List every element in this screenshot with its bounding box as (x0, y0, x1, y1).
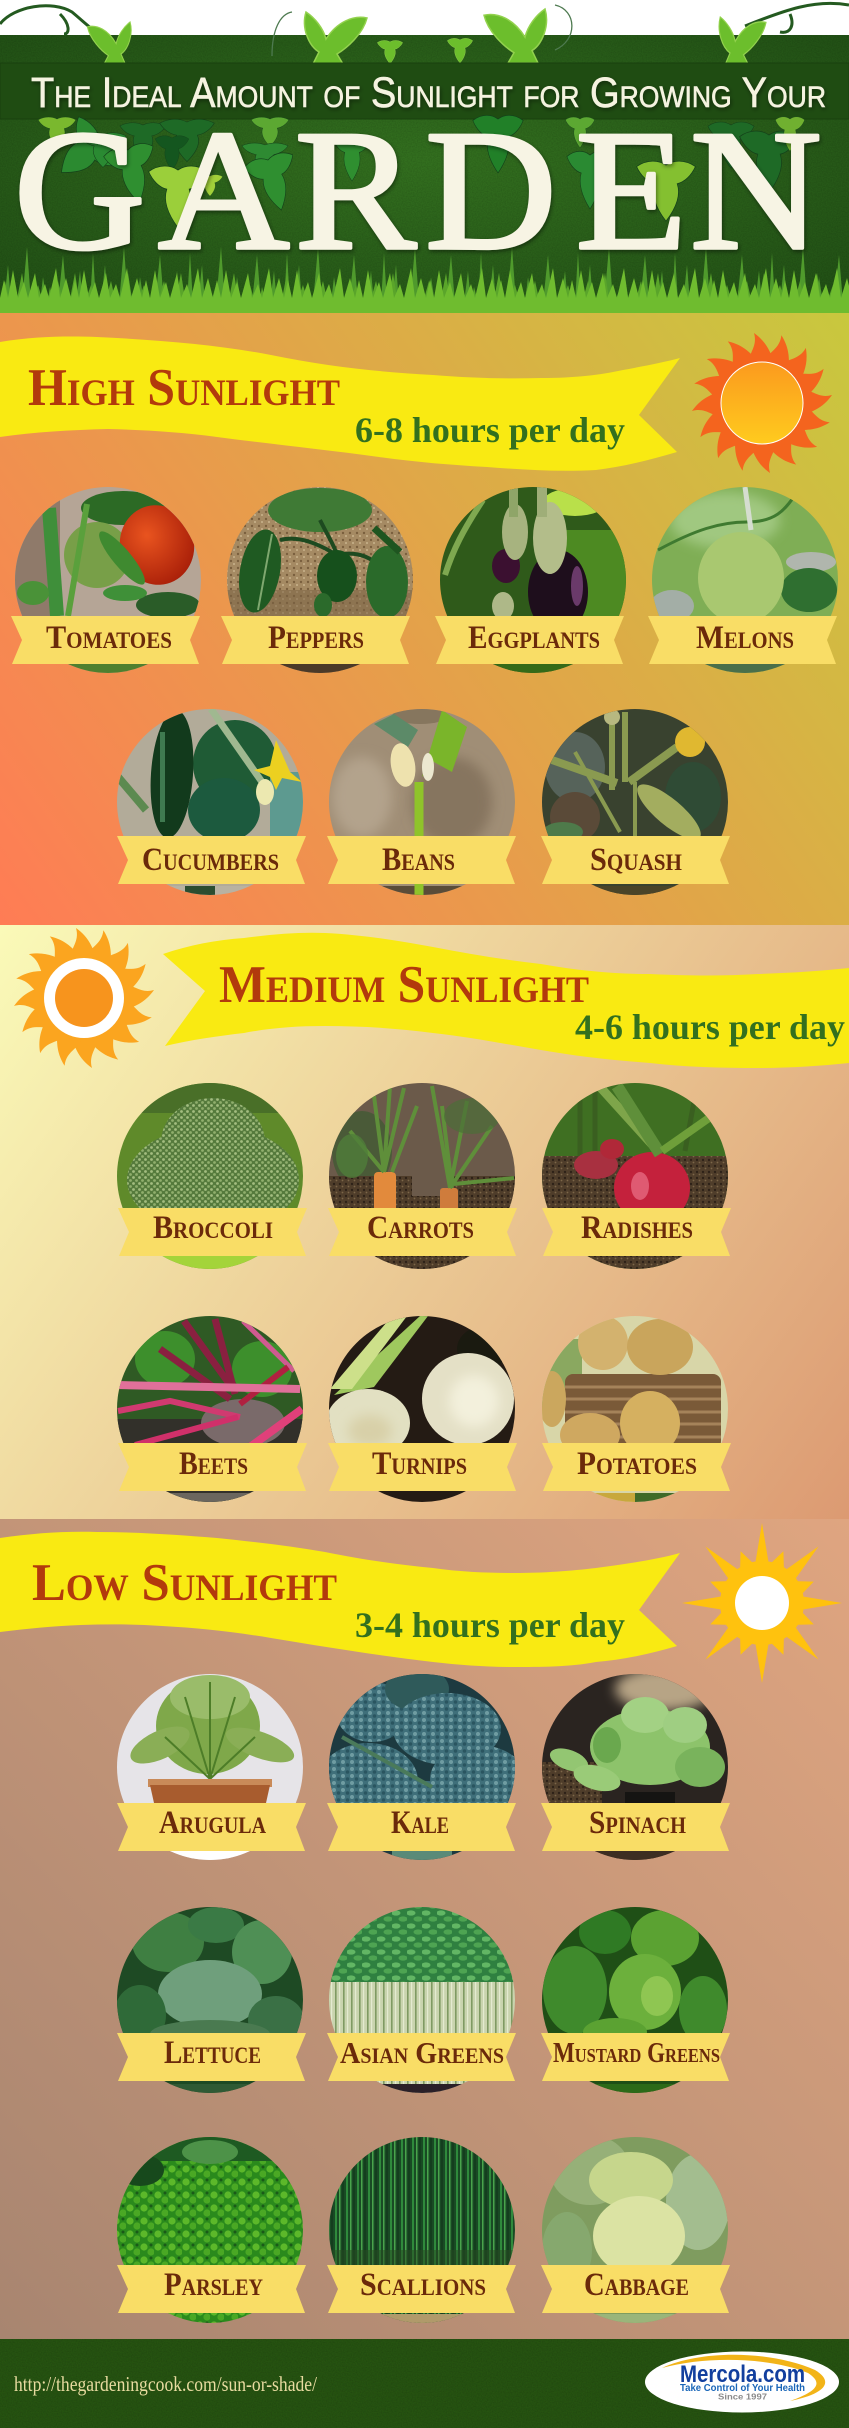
label: Mustard Greens (553, 2038, 720, 2069)
ribbon (118, 1443, 307, 1491)
ribbon (327, 2033, 516, 2081)
ribbon (11, 616, 200, 664)
label: Radishes (581, 1210, 693, 1246)
card: beets (117, 1316, 307, 1502)
card: peppers (221, 487, 413, 673)
label: Spinach (589, 1805, 686, 1841)
logo: mercola: Mercola.com (680, 2361, 805, 2388)
card: lettuce (114, 1907, 306, 2093)
card: broccoli (117, 1083, 307, 1269)
ribbon (117, 836, 306, 884)
label: Arugula (159, 1805, 266, 1841)
photo: turnips (326, 1316, 515, 1502)
footer (0, 2339, 849, 2428)
tendrils (272, 5, 572, 56)
label: Potatoes (577, 1446, 697, 1482)
ribbon (221, 616, 410, 664)
photo: arugula (117, 1674, 303, 1860)
ribbon (327, 836, 516, 884)
label: Carrots (367, 1210, 474, 1246)
ribbon (435, 616, 624, 664)
icon: low sun (682, 1523, 842, 1683)
heading: high sunlight: High Sunlight (28, 359, 340, 417)
ribbon (542, 1208, 731, 1256)
photo: peppers (227, 487, 413, 673)
label: Turnips (372, 1446, 467, 1482)
photo: asian greens (329, 1907, 515, 2093)
card: radishes (542, 1083, 731, 1269)
card: scallions (327, 2137, 516, 2323)
heading: medium sunlight: Medium Sunlight (219, 956, 589, 1014)
card: spinach (541, 1667, 730, 1860)
photo: broccoli (117, 1083, 303, 1269)
logo: mercola: Take Control of Your Health (680, 2382, 805, 2394)
card: turnips (326, 1316, 517, 1502)
card: arugula (117, 1674, 306, 1860)
photo: cabbage (542, 2135, 730, 2323)
photo: lettuce (114, 1907, 304, 2093)
card: squash (541, 709, 730, 895)
icon: medium sun (14, 928, 154, 1068)
ribbon (541, 1803, 730, 1851)
photo: spinach (542, 1667, 728, 1860)
panel: medium sunlight (0, 925, 849, 1519)
vine: top left (0, 6, 104, 38)
photo: scallions (329, 2137, 515, 2323)
card: mustard greens (541, 1907, 730, 2093)
hours: 4-6: 4-6 hours per day (575, 1007, 845, 1047)
card: kale (327, 1674, 516, 1860)
card: cucumbers (117, 709, 306, 895)
label: Cucumbers (142, 842, 279, 878)
header texture (0, 35, 849, 313)
ribbon (541, 2033, 730, 2081)
logo: mercola: Since 1997 (718, 2392, 768, 2402)
label: Kale (391, 1805, 449, 1841)
photo: tomatoes (15, 487, 203, 673)
ribbon (542, 1443, 731, 1491)
label: Scallions (360, 2267, 486, 2303)
hours: 6-8: 6-8 hours per day (355, 410, 625, 450)
grass (0, 243, 849, 313)
ribbon (541, 2265, 730, 2313)
ribbon (117, 2265, 306, 2313)
footer texture (0, 2339, 849, 2428)
label: Tomatoes (46, 620, 172, 656)
ribbon (328, 1443, 517, 1491)
banner: low sunlight (0, 1532, 680, 1667)
photo: potatoes (538, 1316, 728, 1502)
label: Parsley (164, 2267, 263, 2303)
label: Melons (696, 620, 794, 656)
card: asian greens (327, 1907, 516, 2093)
card: parsley (116, 2137, 306, 2323)
panel: high sunlight (0, 313, 849, 925)
photo: squash (542, 709, 728, 895)
banner: high sunlight (0, 337, 680, 471)
photo: kale (329, 1674, 515, 1860)
photo: beans (329, 708, 515, 895)
header: garden title panel (0, 0, 849, 313)
vine: top right (745, 3, 849, 32)
ribbon (541, 836, 730, 884)
ribbon (327, 2265, 516, 2313)
photo: mustard greens (542, 1907, 728, 2093)
card: tomatoes (11, 487, 203, 673)
label: Squash (590, 842, 682, 878)
card: carrots (328, 1083, 517, 1269)
card: cabbage (541, 2135, 730, 2323)
title word GARDEN: GARDEN (14, 96, 822, 286)
leaves over top strip (87, 9, 766, 64)
banner: medium sunlight (163, 933, 849, 1068)
ribbon (327, 1803, 516, 1851)
card: beans (327, 708, 516, 895)
card: melons (648, 487, 838, 673)
heading: low sunlight: Low Sunlight (32, 1554, 337, 1612)
photo: eggplants (440, 487, 626, 673)
card: eggplants (435, 487, 626, 673)
subtitle band (0, 63, 849, 119)
photo: cucumbers (117, 709, 303, 895)
hours: 3-4: 3-4 hours per day (355, 1605, 625, 1645)
photo: carrots (329, 1083, 515, 1269)
label: Peppers (268, 620, 364, 656)
ribbon (328, 1208, 517, 1256)
ribbon (117, 1803, 306, 1851)
photo: parsley (116, 2137, 303, 2323)
label: Beets (179, 1446, 248, 1482)
label: Lettuce (164, 2035, 261, 2071)
label: Cabbage (584, 2267, 689, 2303)
icon: hot sun (692, 333, 832, 473)
card: potatoes (538, 1316, 731, 1502)
photo: radishes (542, 1083, 728, 1269)
photo: melons (650, 487, 838, 673)
panel: low sunlight (0, 1519, 849, 2339)
label: Eggplants (468, 620, 600, 656)
photo: beets (117, 1316, 303, 1502)
label: Broccoli (153, 1210, 273, 1246)
ribbon (118, 1208, 307, 1256)
label: Asian Greens (340, 2035, 504, 2070)
source url: http://thegardeningcook.com/sun-or-shade/ (14, 2372, 317, 2396)
ribbon (648, 616, 837, 664)
ribbon (117, 2033, 306, 2081)
label: Beans (382, 842, 455, 878)
ivy leaves behind title (38, 114, 805, 228)
logo: mercola (645, 2352, 839, 2412)
